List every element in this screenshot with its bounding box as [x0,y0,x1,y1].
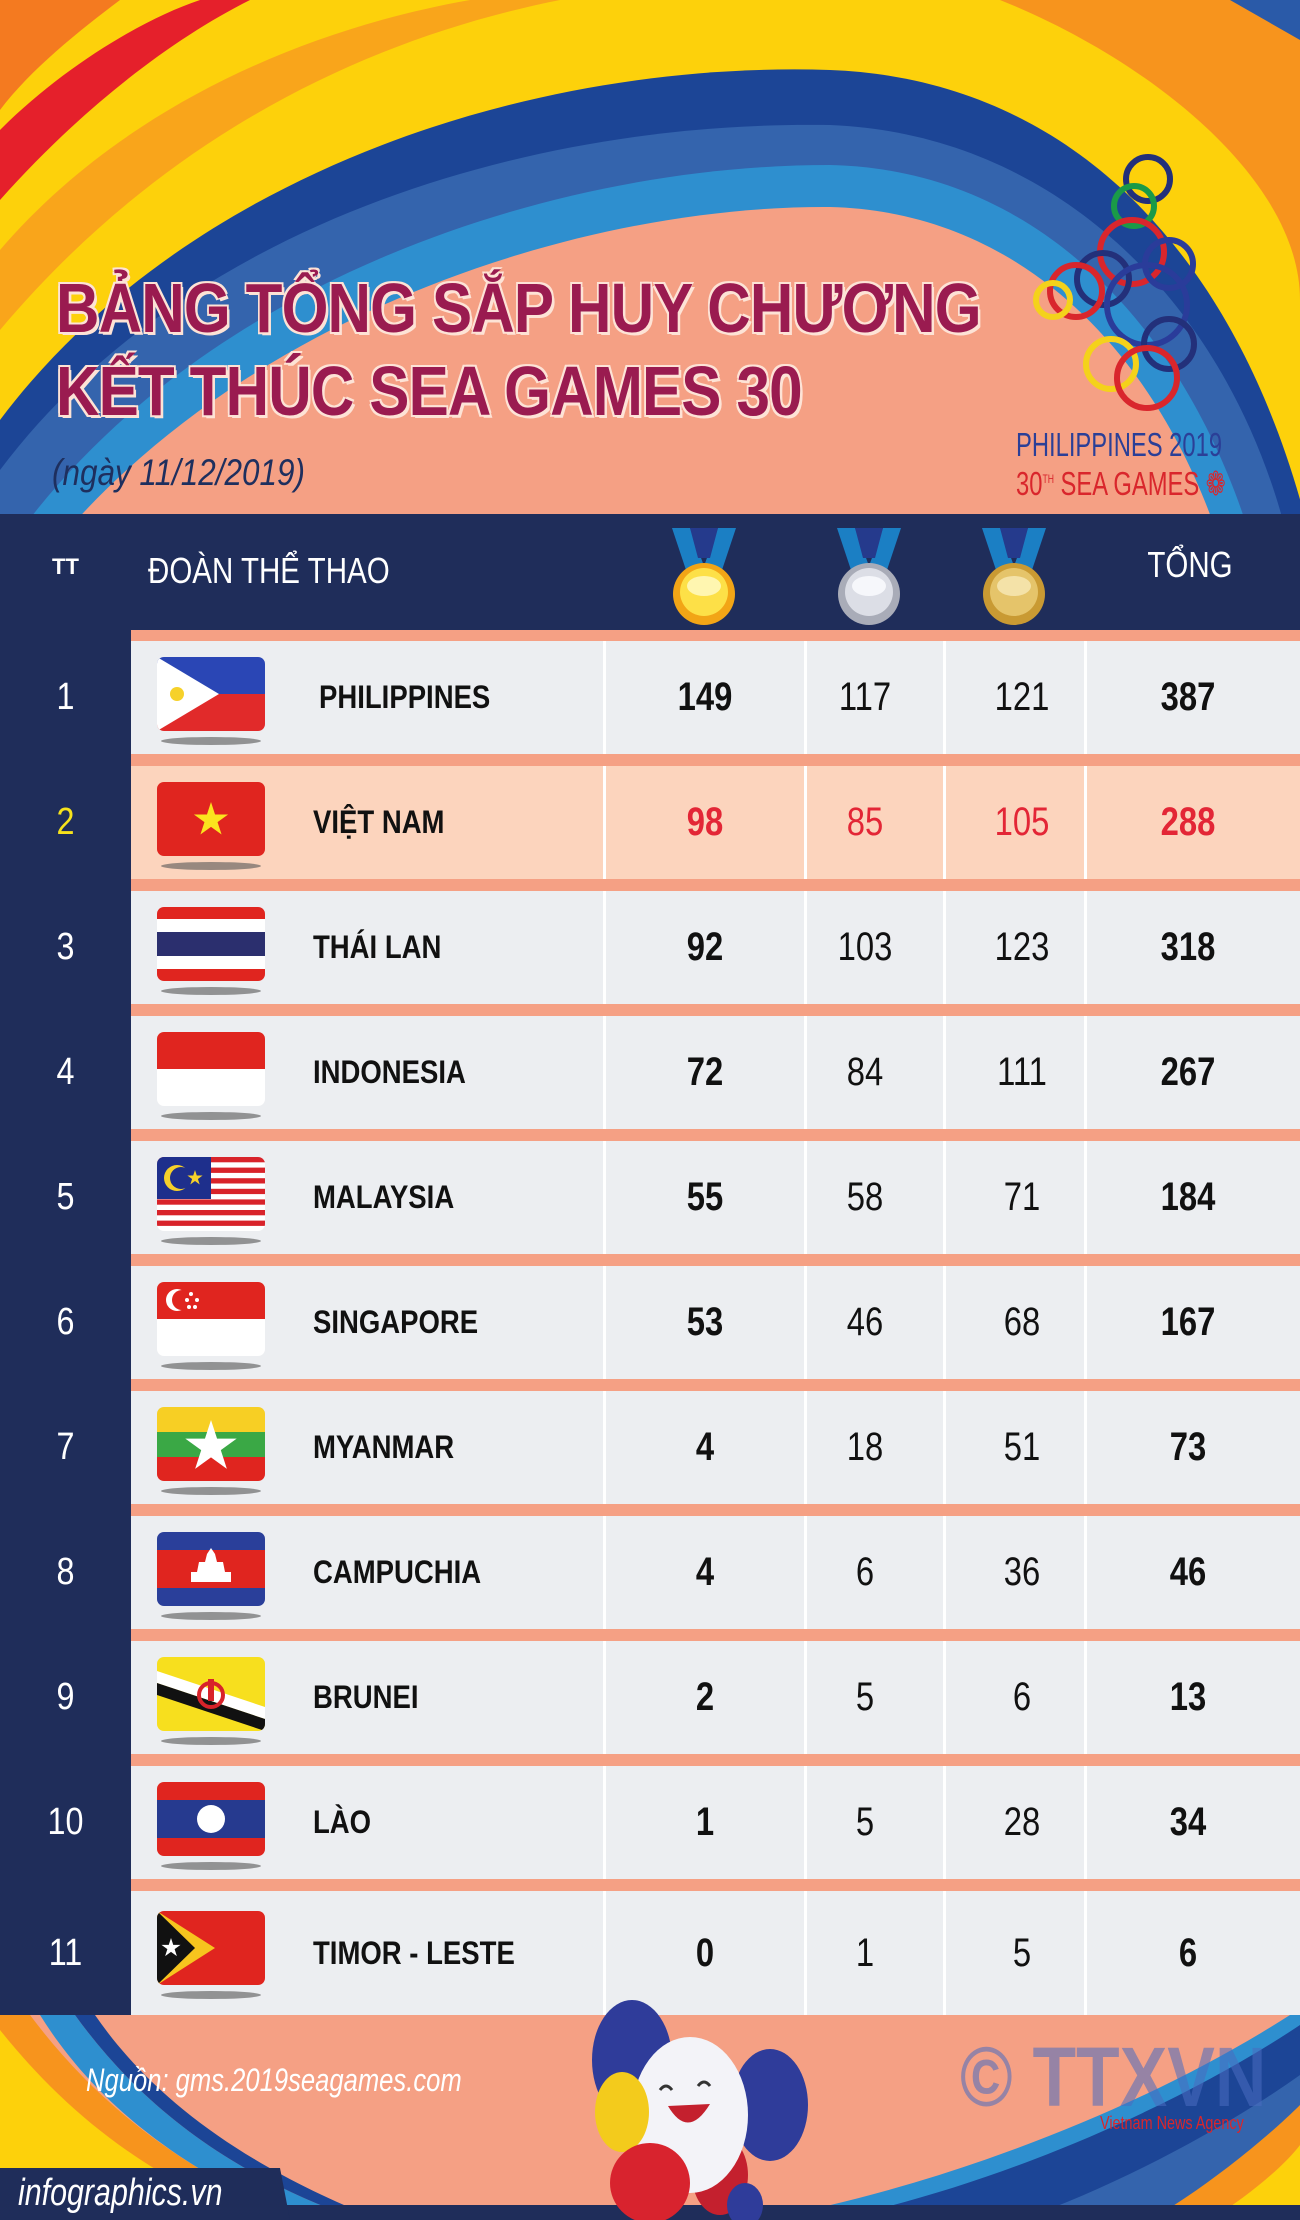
row: Indonesia: 111 [997,1050,1047,1094]
text: 9 [57,1676,74,1718]
row: Indonesia: 267 [1161,1050,1215,1094]
row: Timor-Leste: 1 [856,1931,874,1975]
flag: Vietnam [157,782,265,870]
row: Timor-Leste: TIMOR - LESTE [313,1935,515,1971]
row: Myanmar: MYANMAR [313,1429,454,1465]
row: Thailand [131,891,1300,1004]
date subtitle: (ngày 11/12/2019) [52,452,305,493]
text: 6 [57,1301,74,1343]
row: Thailand: 92 [687,925,723,969]
row: Vietnam: 288 [1161,800,1215,844]
header: total: TỔNG [1147,544,1233,585]
row: Philippines [131,641,1300,754]
row: Philippines: PHILIPPINES [319,679,490,715]
flag: Malaysia [157,1157,265,1245]
mascot [592,2000,808,2220]
text: 11 [49,1932,82,1974]
row: Indonesia: 72 [687,1050,723,1094]
row: Laos: 34 [1170,1800,1206,1844]
row: Singapore [131,1266,1300,1379]
background: rainbow arcs [0,0,1300,514]
flag: Philippines [157,657,265,745]
header: team: ĐOÀN THỂ THAO [148,550,390,591]
row: Philippines: 117 [839,675,891,719]
row: Philippines: 149 [678,675,732,719]
row: Vietnam: 98 [687,800,723,844]
row: Malaysia: 71 [1004,1175,1040,1219]
flag: Laos [157,1782,265,1870]
flag: Myanmar [157,1407,265,1495]
row: Myanmar: 73 [1170,1425,1206,1469]
row: Brunei: 6 [1013,1675,1031,1719]
row: Laos [131,1766,1300,1879]
row: Singapore: SINGAPORE [313,1304,478,1340]
text: 8 [57,1551,74,1593]
row: Timor-Leste: 0 [696,1931,714,1975]
row: Indonesia: 84 [847,1050,883,1094]
row: Cambodia: 6 [856,1550,874,1594]
row: Thailand: 103 [838,925,892,969]
text: 2 [57,801,74,843]
text: 3 [57,926,74,968]
logo text [1016,426,1226,502]
row: Indonesia: INDONESIA [313,1054,466,1090]
source note: Nguồn: gms.2019seagames.com [86,2062,462,2098]
row: Brunei: 2 [696,1675,714,1719]
table header [0,514,1300,630]
flag: Indonesia [157,1032,265,1120]
row: Laos: 5 [856,1800,874,1844]
brand: infographics.vn: infographics.vn [18,2172,222,2214]
flag: Thailand [157,907,265,995]
text: 10 [48,1801,83,1843]
brand: infographics.vn [0,2168,288,2213]
row: Vietnam [131,766,1300,879]
row: Thailand: 123 [995,925,1049,969]
row: Singapore: 53 [687,1300,723,1344]
row: Malaysia: 58 [847,1175,883,1219]
text: 4 [57,1051,74,1093]
flag: Cambodia [157,1532,265,1620]
row: Vietnam: VIỆT NAM [313,804,444,840]
row: Singapore: 167 [1161,1300,1215,1344]
row: Timor-Leste: 6 [1179,1931,1197,1975]
row: Brunei: BRUNEI [313,1679,418,1715]
row: Laos: 1 [696,1800,714,1844]
icon: silver medal [837,528,901,625]
title [56,267,981,430]
row: Malaysia [131,1141,1300,1254]
row: Philippines: 387 [1161,675,1215,719]
logo text: PHILIPPINES 2019 [1016,426,1222,463]
row: Brunei: 13 [1170,1675,1206,1719]
row: Cambodia: 36 [1004,1550,1040,1594]
text: 5 [57,1176,74,1218]
title: BẢNG TỔNG SẮP HUY CHƯƠNG [56,269,981,347]
row: Malaysia: MALAYSIA [313,1179,454,1215]
row: Myanmar: 4 [696,1425,714,1469]
row: Thailand: THÁI LAN [313,929,441,965]
row: Myanmar: 51 [1004,1425,1040,1469]
icon: gold medal [672,528,736,625]
row: Timor-Leste [131,1891,1300,2015]
text: 1 [57,676,74,718]
row: Brunei: 5 [856,1675,874,1719]
row: Cambodia: CAMPUCHIA [313,1554,481,1590]
logo: TTXVN watermark: © TTXVN [960,2030,1266,2124]
row: Myanmar: 18 [847,1425,883,1469]
row: Vietnam: 85 [847,800,883,844]
row: Malaysia: 55 [687,1175,723,1219]
icon: bronze medal [982,528,1046,625]
row: Vietnam: 105 [995,800,1049,844]
row: Cambodia: 46 [1170,1550,1206,1594]
row: Laos: 28 [1004,1800,1040,1844]
row: Myanmar [131,1391,1300,1504]
flag: Singapore [157,1282,265,1370]
logo: TTXVN watermark: Vietnam News Agency [1100,2113,1244,2133]
logo: SEA Games rings [1033,154,1197,411]
flag: Timor-Leste [157,1911,265,1999]
title: KẾT THÚC SEA GAMES 30 [56,352,802,430]
row: Thailand: 318 [1161,925,1215,969]
header: TT: TT [52,554,79,579]
logo text: 30TH SEA GAMES ❁ [1016,465,1226,502]
flag: Brunei [157,1657,265,1745]
row: Singapore: 46 [847,1300,883,1344]
row: Indonesia [131,1016,1300,1129]
row: Brunei [131,1641,1300,1754]
footer background swooshes [0,2015,1300,2220]
text: 7 [57,1426,74,1468]
row: Cambodia [131,1516,1300,1629]
row: Laos: LÀO [313,1804,371,1840]
row: Cambodia: 4 [696,1550,714,1594]
row: Timor-Leste: 5 [1013,1931,1031,1975]
row: Philippines: 121 [995,675,1049,719]
left rank column [0,514,131,2015]
row: Malaysia: 184 [1161,1175,1215,1219]
row: Singapore: 68 [1004,1300,1040,1344]
